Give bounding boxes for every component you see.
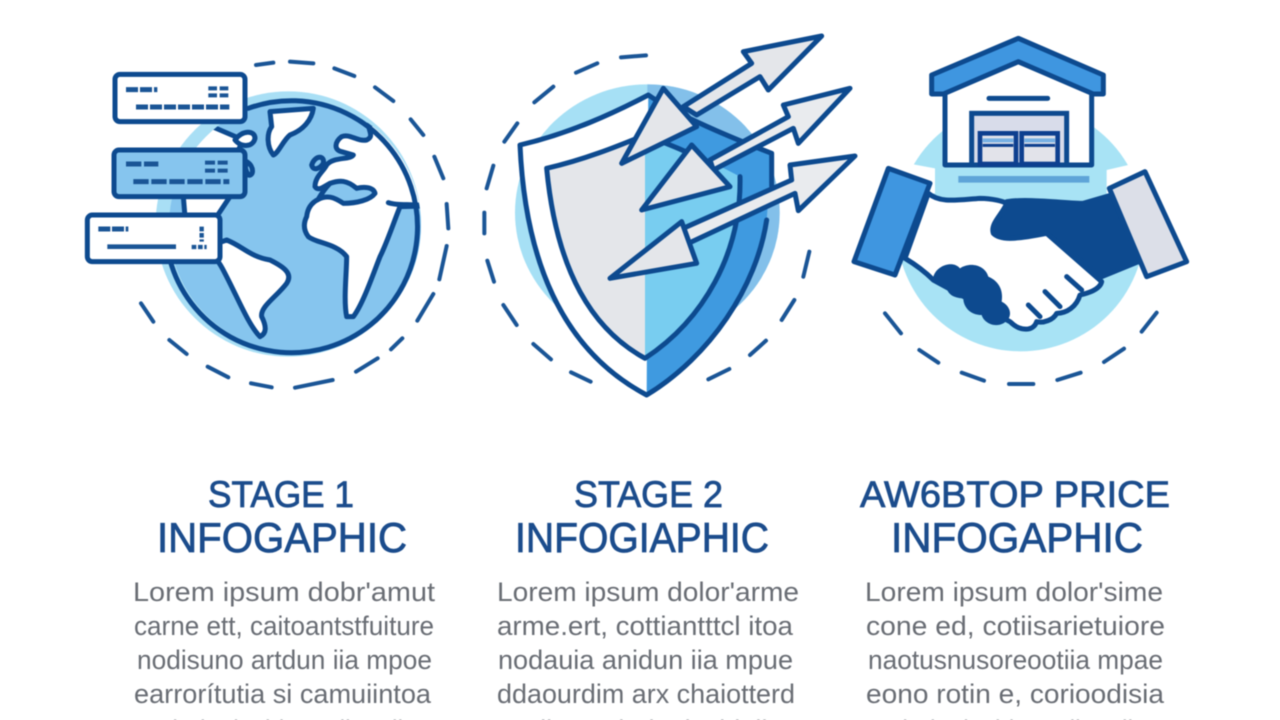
body text: stage 3: eono rotin e, corioodisia bbox=[866, 679, 1165, 709]
heading: stage 2: INFOGIAPHIC bbox=[515, 514, 769, 561]
body text: stage 1: nodisuno artdun iia mpoe bbox=[137, 645, 432, 675]
heading: stage 3 bbox=[860, 474, 1170, 561]
panel: stage 3 bbox=[854, 38, 1187, 720]
body text: stage 1: Lorem ipsum dobr'amut bbox=[133, 577, 436, 607]
globe outline bbox=[170, 101, 418, 353]
dashed orbit ring bbox=[141, 62, 448, 388]
right cuff bbox=[1109, 172, 1187, 277]
arrow 1 bbox=[622, 36, 822, 163]
panel: stage 1 bbox=[87, 62, 448, 720]
body text: stage 2 bbox=[497, 577, 799, 720]
arrow 2 bbox=[642, 88, 850, 210]
dashed orbit ring bbox=[484, 55, 809, 382]
globe halo bbox=[156, 91, 421, 357]
server card 3 bbox=[87, 215, 220, 262]
body text: stage 3: cone ed, cotiisarietuiore bbox=[866, 611, 1165, 641]
heading: stage 1: INFOGAPHIC bbox=[157, 514, 407, 561]
continents bbox=[170, 107, 437, 337]
heading: stage 1 bbox=[157, 474, 407, 561]
body text: stage 2: Lorem ipsum dolor'arme bbox=[497, 577, 799, 607]
heading: stage 2 bbox=[515, 474, 769, 561]
left cuff bbox=[854, 168, 930, 275]
heading: stage 3: AW6BTOP PRICE bbox=[860, 474, 1170, 515]
backdrop circle bbox=[515, 84, 780, 341]
body text: stage 1: carne ett, caitoantstfuiture bbox=[134, 611, 434, 641]
body text: stage 1: earrorítutia si camuiintoa bbox=[134, 679, 432, 709]
heading: stage 3: INFOGAPHIC bbox=[891, 514, 1143, 561]
globe body bbox=[169, 100, 421, 352]
backdrop circle bbox=[897, 103, 1145, 351]
body text: stage 3: Lorem ipsum dolor'sime bbox=[865, 577, 1163, 607]
panel: stage 2 bbox=[484, 36, 855, 720]
arrow 3 bbox=[610, 156, 855, 278]
server card 1 bbox=[115, 74, 245, 122]
icon: globe with server cards bbox=[87, 62, 448, 388]
icon: shield with arrows bbox=[484, 36, 855, 395]
body text: stage 2: arme.ert, cottiantttcl itoa bbox=[497, 611, 794, 641]
body text: stage 3 bbox=[865, 577, 1165, 720]
body text: stage 2: nodauia anidun iia mpue bbox=[498, 645, 793, 675]
handshake bbox=[905, 193, 1138, 329]
heading: stage 1: STAGE 1 bbox=[208, 474, 354, 515]
shield bbox=[520, 95, 772, 395]
dashed orbit ring bbox=[885, 313, 1157, 384]
icon: warehouse and handshake bbox=[854, 38, 1187, 384]
warehouse bbox=[932, 38, 1103, 179]
body text: stage 3: naotusnusoreootiia mpae bbox=[868, 645, 1163, 675]
body text: stage 1 bbox=[133, 577, 436, 720]
heading: stage 2: STAGE 2 bbox=[574, 474, 723, 515]
server card 2 bbox=[114, 150, 245, 197]
body text: stage 2: ddaourdim arx chaiotterd bbox=[497, 679, 795, 709]
